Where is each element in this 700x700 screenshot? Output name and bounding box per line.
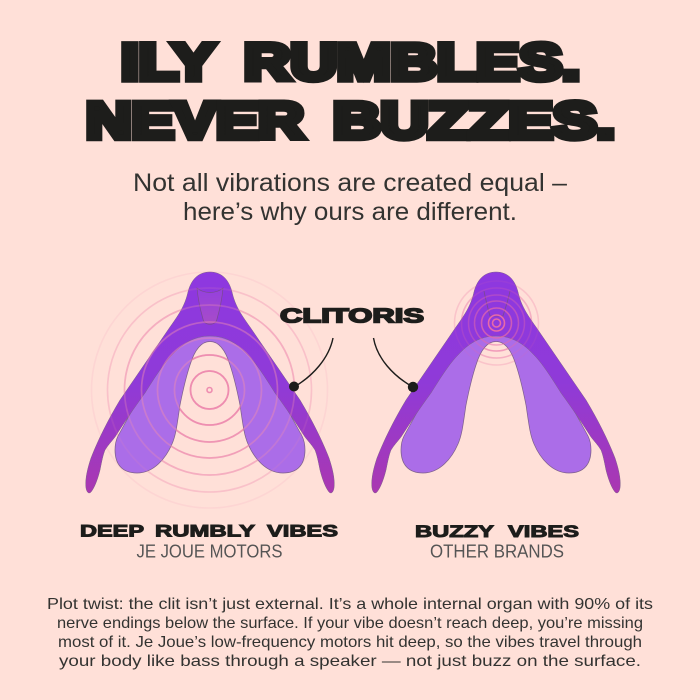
clitoris label: CLITORIS bbox=[280, 306, 424, 328]
body text: most of it. Je Joue’s low-frequency motors hit deep, so the vibes travel through bbox=[58, 634, 642, 651]
ring overlay bbox=[108, 288, 312, 492]
title bbox=[86, 34, 615, 149]
subtitle bbox=[133, 169, 567, 226]
title: NEVER bbox=[86, 92, 304, 149]
diagram: buzzy vibes bbox=[372, 272, 620, 493]
caption: deep rumbly vibes: DEEP bbox=[80, 522, 144, 540]
bulbs bbox=[401, 332, 591, 473]
pointer arrow: right bbox=[374, 338, 418, 392]
body text bbox=[47, 596, 653, 670]
caption: buzzy vibes: OTHER BRANDS bbox=[430, 540, 564, 562]
vibration rings: buzzy bbox=[454, 281, 538, 365]
clitoris body bbox=[372, 272, 620, 493]
title: BUZZES. bbox=[333, 92, 615, 149]
title: ILY bbox=[121, 34, 215, 90]
body text: your body like bass through a speaker — not just buzz on the surface. bbox=[59, 653, 641, 670]
body text: Plot twist: the clit isn’t just external. It’s a whole internal organ with 90% of its bbox=[47, 596, 653, 613]
caption: deep rumbly vibes: RUMBLY bbox=[155, 522, 255, 540]
vibration rings back bbox=[454, 281, 538, 365]
subtitle: Not all vibrations are created equal – bbox=[133, 169, 567, 197]
caption: buzzy vibes bbox=[415, 523, 579, 562]
glans bbox=[484, 291, 510, 316]
pointer arrow: left bbox=[289, 338, 333, 392]
vibration rings: deep bbox=[92, 272, 328, 508]
caption: deep rumbly vibes bbox=[80, 522, 338, 562]
caption: deep rumbly vibes: JE JOUE MOTORS bbox=[136, 540, 282, 562]
caption: buzzy vibes: VIBES bbox=[508, 523, 579, 541]
title: RUMBLES. bbox=[244, 34, 580, 90]
diagram: deep rumbly vibes bbox=[86, 272, 334, 508]
caption: deep rumbly vibes: VIBES bbox=[267, 522, 338, 540]
caption: buzzy vibes: BUZZY bbox=[415, 523, 494, 541]
body text: nerve endings below the surface. If your vibe doesn’t reach deep, you’re missing bbox=[57, 615, 643, 632]
clitoris body bbox=[86, 272, 334, 493]
subtitle: here’s why ours are different. bbox=[183, 198, 517, 226]
bulbs bbox=[115, 332, 305, 473]
glans bbox=[197, 288, 223, 324]
